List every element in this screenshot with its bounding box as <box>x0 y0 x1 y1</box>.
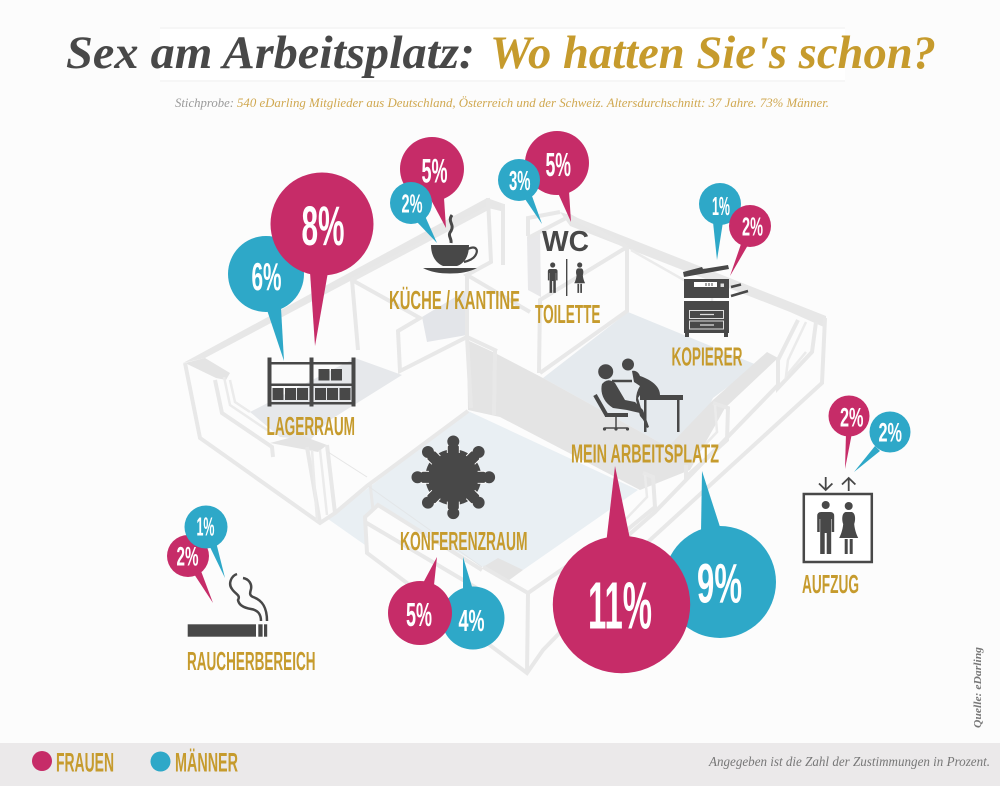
location: Küche / Kantine <box>389 137 520 315</box>
title: Wo hatten Sie's schon? <box>490 27 936 79</box>
subtitle: Stichprobe: <box>175 95 234 110</box>
bubble: Männer 4%: 4% <box>458 603 484 638</box>
icon: cigarette <box>188 574 267 637</box>
label: KONFERENZRAUM <box>400 526 528 556</box>
bubble: Männer 3% <box>498 159 542 224</box>
bubble: Männer 2% <box>390 182 437 243</box>
floor plan <box>183 198 826 673</box>
bubble: Männer 9% <box>664 471 776 638</box>
icon: WC sign <box>542 226 589 296</box>
bubble: Frauen 2%: 2% <box>840 402 864 432</box>
bubble: Frauen 5%: 5% <box>406 596 432 633</box>
label: LAGERRAUM <box>266 411 355 441</box>
title band <box>160 28 845 81</box>
icon: WC sign: WC <box>542 226 589 258</box>
label: MEIN ARBEITSPLATZ <box>571 438 719 468</box>
source note: Quelle: eDarling <box>972 646 984 728</box>
label: KOPIERER <box>672 342 743 372</box>
location: Raucherbereich <box>167 506 316 676</box>
legend: Männer: MÄNNER <box>175 748 238 778</box>
interior walls <box>352 280 358 350</box>
bubble: Männer 3%: 3% <box>509 165 531 196</box>
bubble: Frauen 2% <box>729 205 771 276</box>
label: KÜCHE / KANTINE <box>389 285 520 315</box>
title: Sex am Arbeitsplatz: <box>66 27 475 79</box>
label: RAUCHERBEREICH <box>187 646 316 676</box>
label: TOILETTE <box>535 299 600 329</box>
bubble: Männer 2%: 2% <box>878 418 902 448</box>
subtitle: 540 eDarling Mitglieder aus Deutschland, Österreich und der Schweiz. Altersdurchschnitt: 37 Jahre. 73% Männer. <box>237 95 829 110</box>
outer walls <box>183 198 505 363</box>
bubble: Frauen 8% <box>270 172 374 346</box>
icon: elevator <box>804 477 872 562</box>
bubble: Männer 4% <box>442 557 504 650</box>
icon: copier <box>683 265 748 337</box>
location: Mein Arbeitsplatz <box>553 358 776 673</box>
bubble: Männer 1% <box>184 506 228 578</box>
bubble: Frauen 5% <box>525 131 589 222</box>
bubble: Frauen 2%: 2% <box>742 212 763 242</box>
bubble: Männer 6%: 6% <box>252 256 282 299</box>
icon: coffee cup <box>423 215 477 274</box>
legend: Männer <box>150 748 238 778</box>
bubble: Männer 1%: 1% <box>712 191 730 221</box>
label: AUFZUG <box>802 569 859 599</box>
left window <box>215 380 273 457</box>
right windows <box>778 320 816 388</box>
bubble: Frauen 5%: 5% <box>546 146 571 183</box>
location: Aufzug <box>802 396 910 599</box>
bubble: Frauen 11%: 11% <box>588 568 652 644</box>
bubble: Männer 1%: 1% <box>196 512 214 542</box>
bubble: Frauen 2% <box>167 535 213 603</box>
bubble: Frauen 8%: 8% <box>302 194 344 257</box>
bubble: Frauen 5%: 5% <box>422 152 448 190</box>
location: Toilette <box>498 131 600 329</box>
bubble: Männer 6% <box>228 236 304 361</box>
title <box>66 27 936 79</box>
bubble: Frauen 5% <box>388 557 452 645</box>
footer bar <box>0 743 1000 786</box>
floors <box>328 411 638 570</box>
location: Konferenzraum <box>388 436 528 650</box>
bubble: Frauen 11% <box>553 466 690 673</box>
bubble: Männer 9%: 9% <box>697 552 742 614</box>
bubble: Frauen 2% <box>828 396 870 469</box>
bubble: Frauen 5% <box>400 137 464 228</box>
bubble: Männer 1% <box>699 183 741 260</box>
legend: Frauen: FRAUEN <box>56 748 114 778</box>
thick grey walls <box>467 340 778 490</box>
location: Lagerraum <box>228 172 374 441</box>
icon: conference table <box>412 436 495 519</box>
pillars <box>307 447 320 523</box>
bubble: Männer 2%: 2% <box>402 188 422 218</box>
legend: Frauen <box>32 748 114 778</box>
icon: couple at desk <box>595 358 683 432</box>
icon: shelf <box>268 358 356 406</box>
bubble: Frauen 2%: 2% <box>176 542 198 572</box>
location: Kopierer <box>672 183 771 372</box>
bubble: Männer 2% <box>854 412 910 472</box>
